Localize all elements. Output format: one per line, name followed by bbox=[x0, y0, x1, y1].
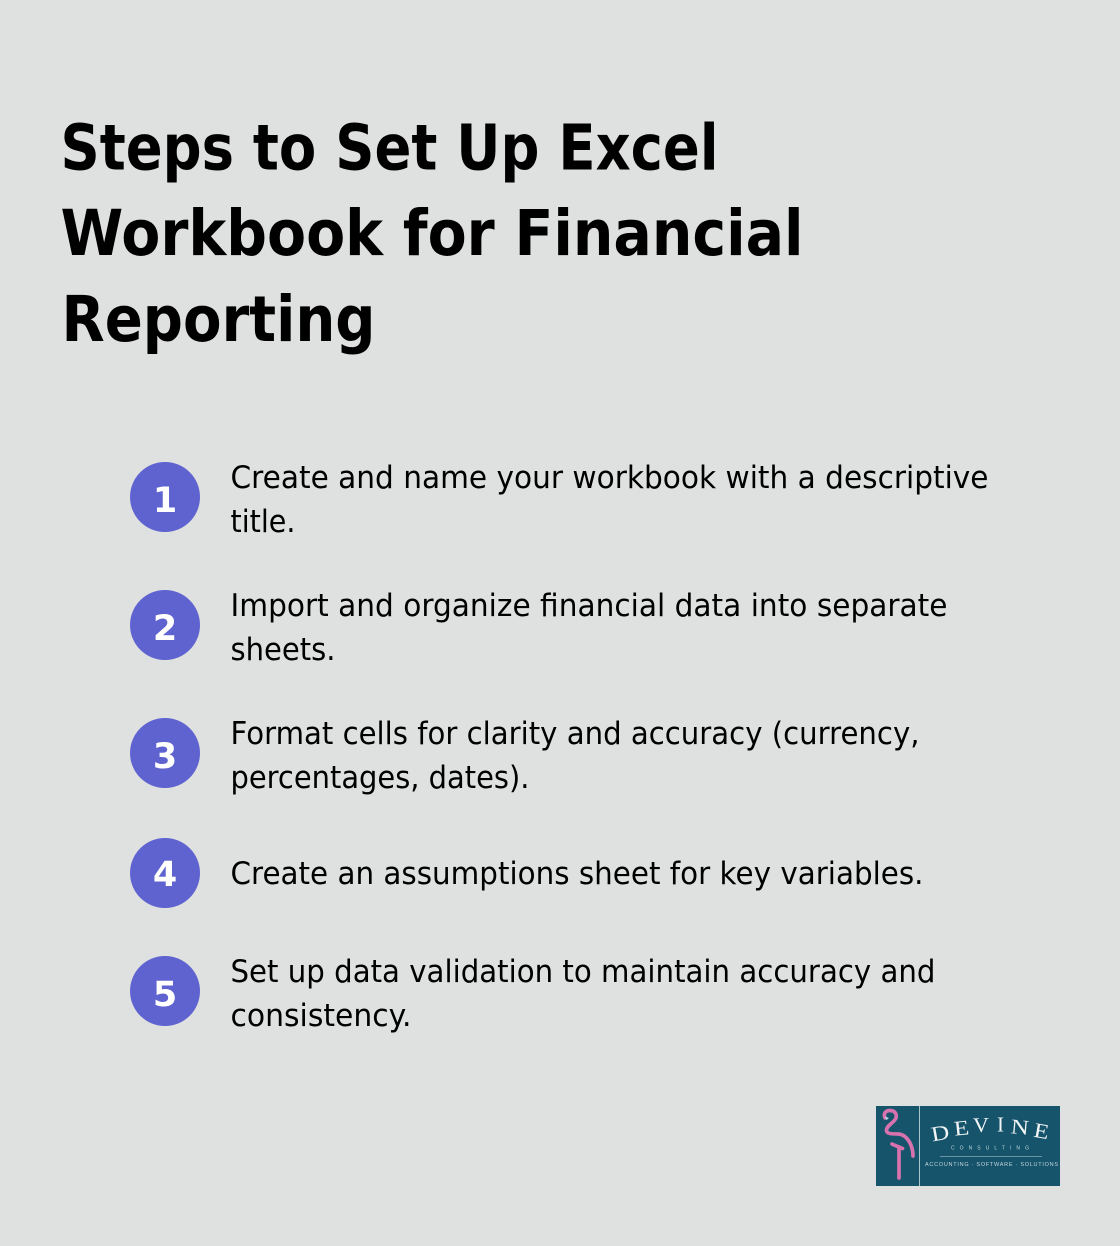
number badge 5 bbox=[130, 956, 200, 1026]
step 5 text: consistency. bbox=[230, 998, 412, 1034]
logo wordmark: D bbox=[929, 1120, 951, 1146]
step 1 text bbox=[230, 460, 988, 540]
number badge 3: 3 bbox=[153, 737, 177, 777]
logo wordmark bbox=[925, 1112, 1058, 1168]
number badge 3 bbox=[130, 718, 200, 788]
step 1 bbox=[130, 460, 988, 540]
step 2 text bbox=[230, 588, 948, 668]
step 1 text: Create and name your workbook with a descriptive bbox=[230, 460, 988, 496]
step 3 text bbox=[230, 716, 920, 796]
step 4 text: Create an assumptions sheet for key variables. bbox=[230, 856, 924, 892]
number badge 4: 4 bbox=[153, 855, 177, 895]
step 4 bbox=[130, 838, 924, 908]
logo wordmark: E bbox=[1032, 1118, 1051, 1144]
logo: Devine Consulting bbox=[876, 1106, 1060, 1186]
step 5 text: Set up data validation to maintain accuracy and bbox=[230, 954, 936, 990]
step 2 text: Import and organize financial data into separate bbox=[230, 588, 948, 624]
logo wordmark: N bbox=[1010, 1114, 1030, 1140]
step 3 text: Format cells for clarity and accuracy (currency, bbox=[230, 716, 920, 752]
step 3 bbox=[130, 716, 920, 796]
number badge 2: 2 bbox=[153, 609, 177, 649]
icon: flamingo bbox=[884, 1110, 913, 1178]
number badge 1: 1 bbox=[153, 481, 177, 521]
number badge 2 bbox=[130, 590, 200, 660]
logo wordmark: E bbox=[953, 1115, 970, 1141]
step 5 bbox=[130, 954, 936, 1034]
number badge 4 bbox=[130, 838, 200, 908]
number badge 1 bbox=[130, 462, 200, 532]
logo wordmark: V bbox=[973, 1113, 989, 1137]
step 2 bbox=[130, 588, 948, 668]
logo wordmark: I bbox=[997, 1112, 1004, 1136]
number badge 5: 5 bbox=[153, 975, 177, 1015]
logo wordmark: CONSULTING bbox=[951, 1146, 1029, 1152]
title bbox=[60, 112, 804, 356]
logo wordmark: ACCOUNTING · SOFTWARE · SOLUTIONS bbox=[925, 1162, 1058, 1168]
step 1 text: title. bbox=[230, 504, 296, 540]
step 2 text: sheets. bbox=[230, 632, 336, 668]
step 3 text: percentages, dates). bbox=[230, 760, 530, 796]
title: Steps to Set Up Excel bbox=[60, 112, 718, 184]
title: Workbook for Financial bbox=[60, 197, 804, 270]
step 5 text bbox=[230, 954, 936, 1034]
logo divider bbox=[919, 1106, 920, 1186]
title: Reporting bbox=[62, 283, 376, 356]
